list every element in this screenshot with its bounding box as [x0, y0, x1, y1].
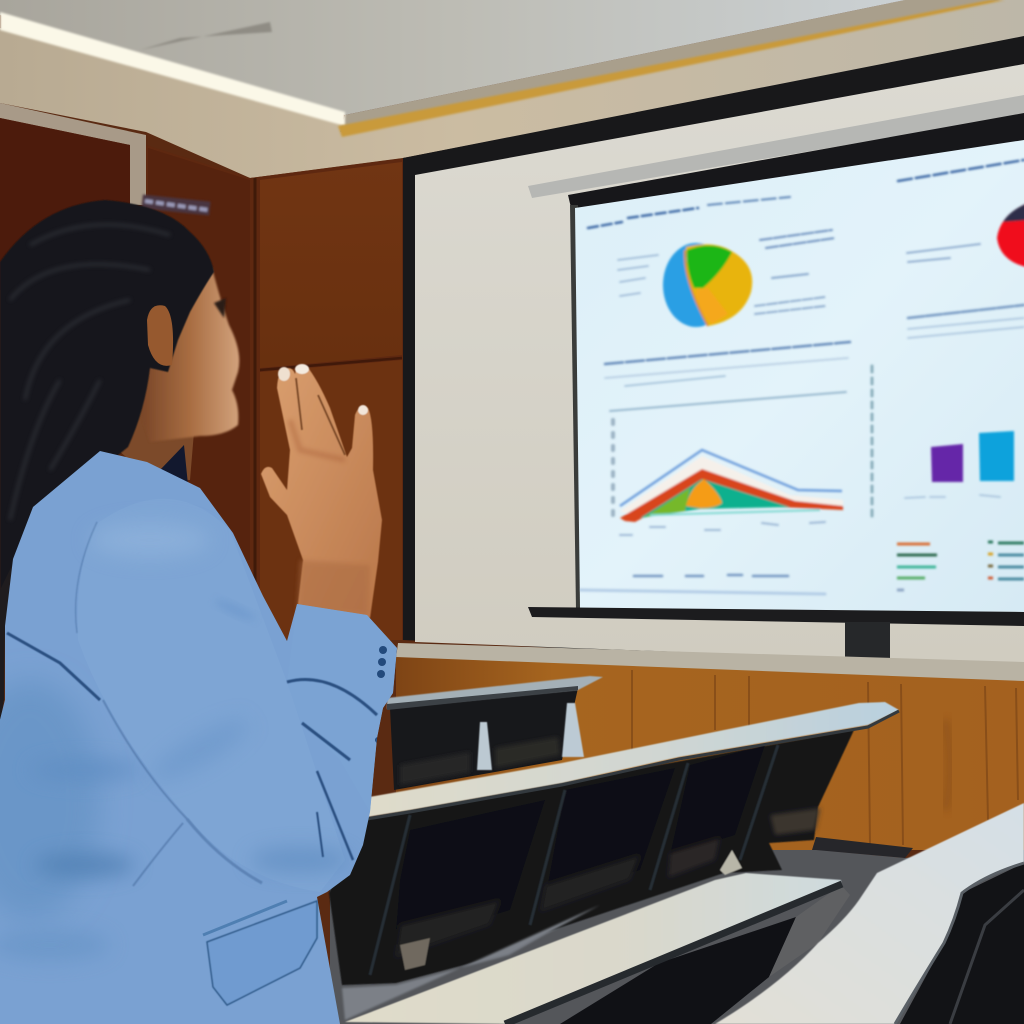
- projector screen housing: [528, 95, 1024, 610]
- sleeve shading: [78, 499, 345, 892]
- screen bottom rail and stand: [528, 607, 1024, 661]
- small wall sign: [141, 194, 211, 216]
- ear: [147, 305, 173, 366]
- front desk: [345, 873, 850, 1024]
- screen: [575, 140, 1024, 612]
- back row desk and chairs: [387, 676, 603, 790]
- floor visible under chairs: [342, 905, 600, 1020]
- area chart: [620, 450, 843, 522]
- long hair: [0, 200, 214, 600]
- projection wall with dark frame: [403, 36, 1024, 672]
- lower wood wall: [396, 657, 1024, 858]
- ledge: [396, 643, 1024, 682]
- face: [130, 268, 239, 442]
- wood wall panels: [146, 145, 405, 640]
- pie chart: [663, 243, 752, 327]
- sleeve buttons: [375, 646, 387, 743]
- hair strand left edge: [0, 555, 17, 725]
- hand: [261, 364, 382, 618]
- legend: [897, 542, 1024, 590]
- right curved desk: [715, 803, 1024, 1024]
- screen headings: [580, 160, 1024, 594]
- back shading: [0, 680, 100, 920]
- amber ceiling light strip: [338, 0, 1005, 137]
- middle row chairs: [329, 730, 854, 985]
- presenter: [0, 200, 400, 1024]
- eye: [214, 298, 226, 318]
- jacket: [0, 440, 400, 1024]
- neck and dark collar: [118, 380, 195, 485]
- floor: [330, 850, 1024, 1024]
- seam lines: [7, 522, 377, 886]
- hair highlights: [10, 225, 170, 520]
- white ceiling light strip: [0, 12, 345, 126]
- middle row desk: [367, 702, 899, 819]
- pocket flap: [207, 901, 317, 1005]
- red pie chart: [997, 202, 1024, 268]
- ceiling: [0, 0, 1024, 178]
- cuff: [287, 604, 397, 812]
- door and frame: [0, 103, 146, 290]
- bar chart: [931, 431, 1014, 482]
